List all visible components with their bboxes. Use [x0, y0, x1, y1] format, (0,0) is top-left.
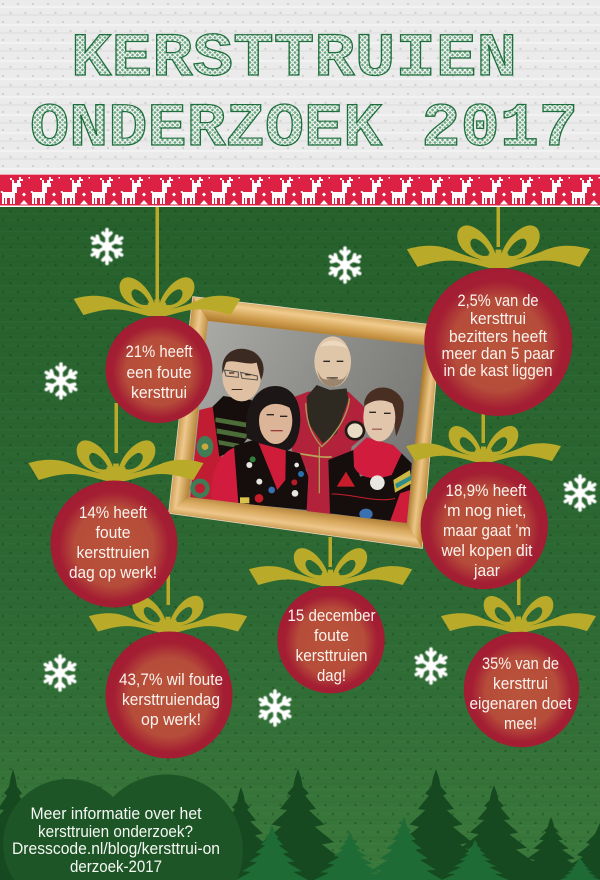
ornament: 18,9%: [406, 408, 561, 589]
gold picture frame with photo: [169, 297, 440, 548]
text: 35%: eigenaren doet: [470, 695, 572, 713]
text: 43,7%: 43,7% wil foute: [119, 671, 223, 689]
text: 35%: [470, 655, 572, 733]
text: 14%: foute: [96, 524, 130, 542]
text: 18,9%: [441, 482, 533, 580]
photo of four people in Christmas sweaters: [189, 321, 424, 523]
text: 15 december: [288, 607, 376, 685]
text: 14%: dag op werk!: [69, 564, 157, 582]
ornament: 43,7%: [89, 575, 247, 758]
reindeer pattern band: [0, 174, 600, 207]
text: 2,5%: kersttrui: [470, 310, 526, 328]
title: [30, 25, 578, 164]
text: 14%: 14% heeft: [79, 504, 147, 522]
ornament: 21%: [74, 207, 240, 423]
text: 2,5%: bezitters heeft: [449, 328, 547, 346]
text: 43,7%: kersttruiendag: [122, 691, 220, 709]
footer text: kersttruien onderzoek?: [38, 822, 193, 841]
text: 2,5%: [442, 292, 555, 380]
knitted white header background: [0, 0, 600, 175]
text: 2,5%: in de kast liggen: [444, 362, 552, 380]
text: 2,5%: meer dan 5 paar: [442, 345, 555, 363]
man left: [190, 407, 222, 500]
ornament: 2,5%: [407, 207, 590, 416]
text: 18,9%: 18,9% heeft: [446, 482, 527, 500]
green knitted background: [0, 207, 600, 880]
ornament: 35%: [441, 575, 596, 747]
footer text: Meer informatie over het: [30, 804, 202, 823]
text: 43,7%: [119, 671, 223, 729]
ornament: 15 december: [249, 537, 412, 693]
text: 15 december: foute: [314, 627, 349, 645]
footer text: derzoek-2017: [70, 857, 162, 876]
text: 18,9%: ‘m nog niet,: [444, 502, 526, 520]
text: 43,7%: op werk!: [141, 711, 201, 729]
text: 2,5%: 2,5% van de: [458, 292, 538, 310]
text: 15 december: kersttruien: [296, 647, 368, 665]
title: ONDERZOEK 2017: [30, 95, 578, 164]
text: 21%: een foute: [126, 364, 192, 382]
snowflakes: [43, 230, 597, 725]
text: 18,9%: maar gaat ’m: [443, 522, 531, 540]
woman centre: [211, 447, 238, 503]
title: KERSTTRUIEN: [71, 25, 517, 94]
ornament: 14%: [28, 403, 203, 608]
text: 21%: 21% heeft: [126, 343, 193, 361]
text: 35%: 35% van de: [482, 655, 559, 673]
text: 18,9%: wel kopen dit: [441, 542, 533, 560]
text: 18,9%: jaar: [473, 562, 500, 580]
text: 15 december: 15 december: [288, 607, 376, 625]
text: 35%: kersttrui: [493, 675, 548, 693]
man back right: [292, 392, 364, 517]
text: 21%: [126, 343, 193, 402]
footer heart-shaped panel: [3, 775, 243, 880]
text: 14%: [69, 504, 157, 582]
forest of trees: [0, 769, 600, 880]
footer text: [12, 804, 220, 876]
woman right: [328, 450, 412, 522]
text: 35%: mee!: [504, 715, 537, 733]
text: 21%: kersttrui: [131, 384, 187, 402]
footer text: Dresscode.nl/blog/kersttrui-on: [12, 839, 220, 858]
text: 14%: kersttruien: [76, 544, 150, 562]
text: 15 december: dag!: [317, 667, 346, 685]
